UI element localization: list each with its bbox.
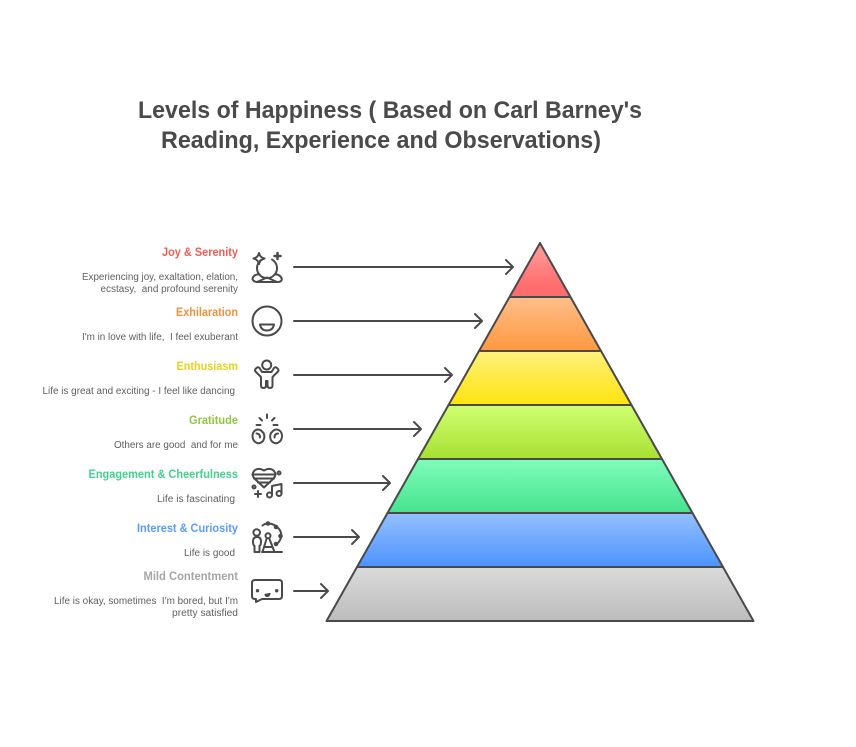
label: mild contentment — [54, 569, 238, 619]
label: joy and serenity: Joy & Serenity — [162, 245, 238, 259]
title — [138, 97, 642, 154]
label: exhilaration: Exhilaration — [176, 305, 238, 319]
arrow: exhilaration — [294, 314, 482, 328]
label: enthusiasm: Enthusiasm — [176, 359, 238, 373]
icon: striped heart and music notes — [252, 469, 282, 498]
title: Levels of Happiness ( Based on Carl Barney's — [138, 97, 642, 124]
pyramid tier: interest and curiosity — [357, 513, 723, 567]
label: mild contentment: pretty satisfied — [172, 608, 238, 619]
label: gratitude: Others are good and for me — [114, 440, 238, 451]
label: joy and serenity: ecstasy, and profound serenity — [100, 284, 238, 295]
pyramid tier: enthusiasm — [448, 351, 632, 405]
arrow: mild contentment — [294, 584, 328, 598]
label: engagement and cheerfulness: Life is fascinating — [157, 494, 235, 505]
label: exhilaration — [82, 305, 238, 343]
label: exhilaration: I'm in love with life, I feel exuberant — [82, 332, 238, 343]
icon: two people and ferris wheel — [253, 522, 282, 552]
label: mild contentment: Life is okay, sometimes I'm bored, but I'm — [54, 596, 238, 607]
label: joy and serenity: Experiencing joy, exaltation, elation, — [82, 272, 238, 283]
label: enthusiasm: Life is great and exciting - I feel like dancing — [42, 386, 235, 397]
label: engagement and cheerfulness — [88, 467, 238, 505]
arrow: joy and serenity — [294, 260, 513, 274]
pyramid tier: mild contentment — [326, 567, 754, 621]
pyramid tier: gratitude — [418, 405, 662, 459]
arrow: interest and curiosity — [294, 530, 359, 544]
arrow: enthusiasm — [294, 368, 452, 382]
arrow: gratitude — [294, 422, 421, 436]
title: Reading, Experience and Observations) — [161, 127, 601, 154]
icon: laughing face — [252, 306, 282, 336]
label: engagement and cheerfulness: Engagement & Cheerfulness — [88, 467, 238, 481]
pyramid tier: joy and serenity — [510, 243, 570, 297]
label: joy and serenity — [82, 245, 238, 295]
icon: meditating figure with sparkles — [252, 253, 282, 282]
label: interest and curiosity — [137, 521, 238, 559]
pyramid chart — [326, 243, 754, 621]
icon: boxing gloves with rays — [252, 414, 282, 443]
label: mild contentment: Mild Contentment — [144, 569, 238, 583]
label: enthusiasm — [42, 359, 238, 397]
label: gratitude: Gratitude — [189, 413, 238, 427]
label: interest and curiosity: Life is good — [184, 548, 235, 559]
icon: person with raised arms — [255, 360, 278, 388]
icon: smiling speech bubble — [252, 580, 282, 602]
label: gratitude — [114, 413, 238, 451]
pyramid tier: engagement and cheerfulness — [388, 459, 692, 513]
pyramid tier: exhilaration — [479, 297, 601, 351]
arrow: engagement and cheerfulness — [294, 476, 390, 490]
label: interest and curiosity: Interest & Curiosity — [137, 521, 238, 535]
